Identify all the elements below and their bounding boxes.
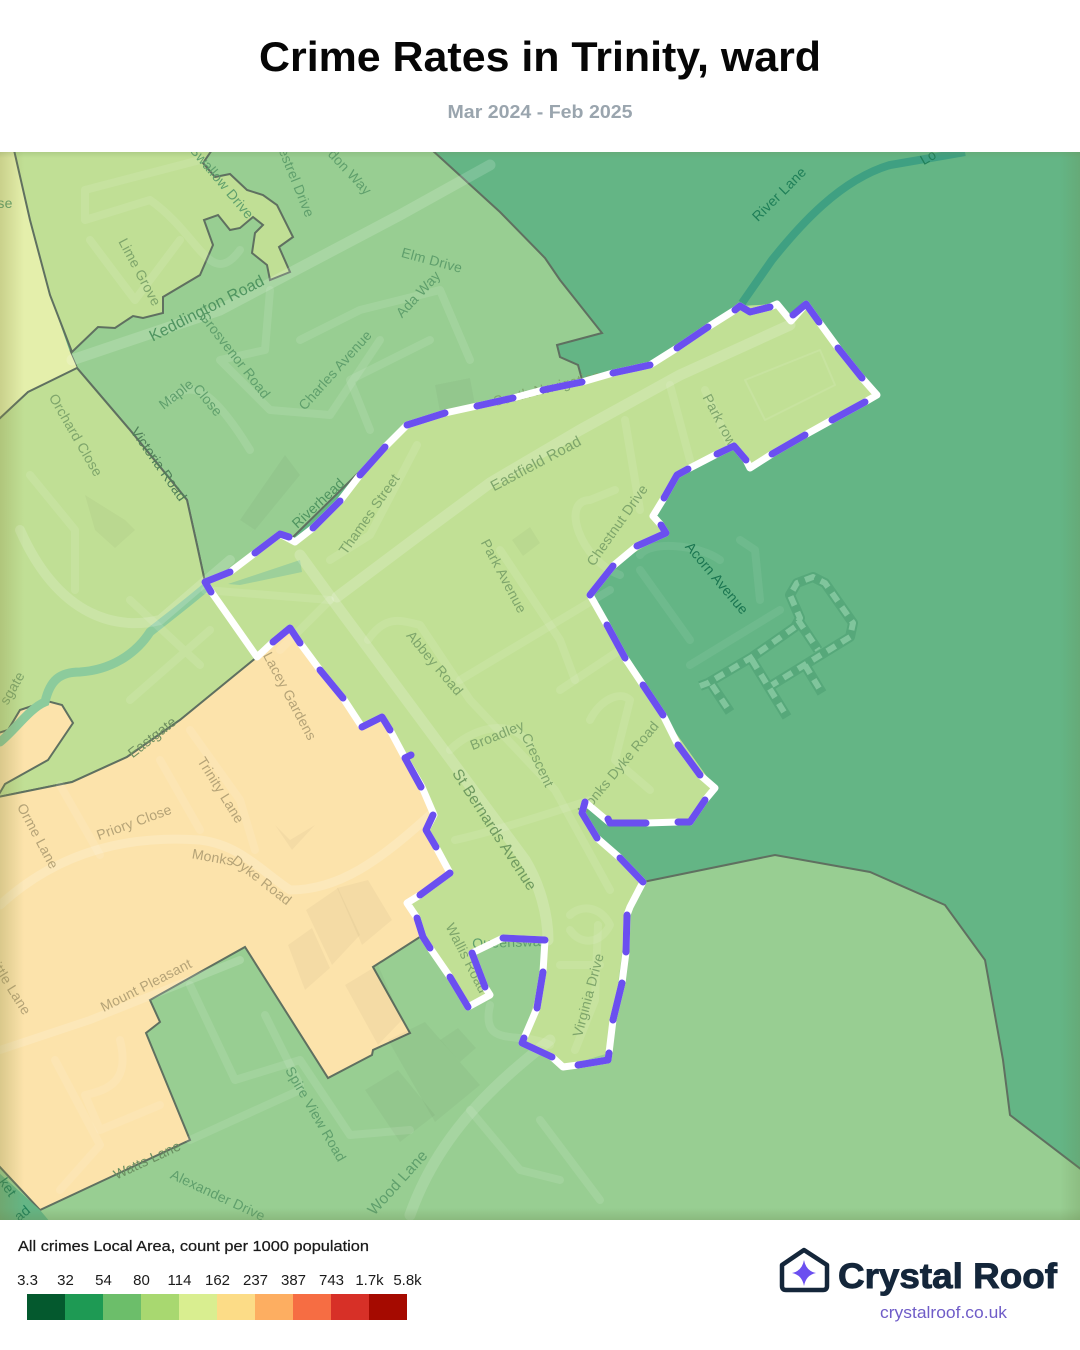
road labels: green areas (0, 137, 939, 1224)
legend title: All crimes Local Area, count per 1000 population (18, 1238, 369, 1255)
buildings (85, 378, 540, 1142)
road labels: orange area: Trinity Lane (194, 754, 248, 826)
website: crystalroof.co.uk (880, 1304, 1008, 1322)
road labels: orange area: Monks (191, 845, 235, 869)
ward boundary: purple dashes (205, 304, 865, 1065)
road labels: orange area: Lacey Gardens (260, 649, 320, 743)
corner area: south-west dark green (0, 1172, 50, 1222)
legend scale values: 162 (205, 1272, 230, 1289)
ward boundary: white line (205, 304, 877, 1067)
legend scale values: 32 (57, 1272, 74, 1289)
legend scale values: 114 (168, 1272, 191, 1289)
road labels: ward: Thames Street (335, 471, 403, 557)
legend scale values: 3.3 (17, 1272, 38, 1289)
legend scale values (17, 1272, 422, 1289)
legend scale values: 1.7k (355, 1272, 384, 1289)
road labels: orange area: Mount Pleasant (98, 955, 194, 1015)
road labels: green areas: Acorn Avenue (682, 539, 752, 617)
road labels: green areas: Victoria Road (128, 424, 190, 504)
road labels: ward: Crescent (519, 731, 557, 789)
road labels: green areas: Close (190, 381, 226, 419)
road labels: green areas: Watts Lane (111, 1137, 183, 1183)
map (0, 152, 1080, 1220)
legend scale values: 237 (243, 1272, 268, 1289)
road labels: green areas: Maple (156, 376, 196, 412)
road labels: ward: Virginia Drive (569, 951, 607, 1039)
logo wordmark: Crystal Roof (838, 1257, 1057, 1296)
road labels: ward (335, 367, 741, 1039)
road labels: ward: Abbey Road (403, 628, 467, 698)
crime rate area: western light green (0, 368, 257, 797)
legend scale values: 80 (133, 1272, 150, 1289)
road labels: ward: Chestnut Drive (583, 481, 651, 569)
road labels: green areas: River Lane (749, 164, 809, 224)
road labels: orange area: Orme Lane (14, 801, 62, 871)
road labels: orange area (0, 649, 320, 1018)
ward area: Trinity (205, 304, 877, 1067)
crime rate area: pale western strip (0, 150, 77, 420)
boundary: southern mid green edge (643, 855, 1080, 1170)
road labels: green areas: Wood Lane (365, 1147, 431, 1219)
road labels: green areas: Orchard Close (46, 391, 106, 479)
crime rate area: southern mid green (0, 855, 1080, 1222)
road labels: ward: Broadley (468, 717, 526, 753)
road labels: ward: Park row (700, 391, 741, 449)
estate road: hatched cul-de-sac (700, 577, 853, 717)
road labels: green areas: Lime Grove (115, 235, 165, 309)
legend scale values: 5.8k (393, 1272, 422, 1289)
legend scale values: 54 (95, 1272, 112, 1289)
road labels: ward: Monks Dyke Road (574, 718, 662, 818)
crime rate area: highest band, orange (0, 628, 470, 1210)
river (0, 560, 302, 742)
icon: house with star (782, 1250, 827, 1290)
subtitle: date range: Mar 2024 - Feb 2025 (448, 101, 632, 122)
road labels: ward: Queensway (472, 933, 548, 951)
road labels: green areas: Eastgate (125, 713, 179, 761)
crime rate area: lowest band background (0, 152, 1080, 1220)
road labels: green areas: Keddington Road (147, 273, 267, 345)
crime rate area: northern mid green (70, 150, 602, 582)
road labels: orange area: Priory Close (94, 801, 174, 843)
road labels: ward: South Navigation (492, 367, 602, 409)
road labels: green areas: Riverhead (289, 475, 347, 531)
legend scale values: 743 (319, 1272, 344, 1289)
logo (780, 1248, 1058, 1322)
crime rate area: north-west light green (14, 150, 293, 352)
road labels: green areas: Charles Avenue (295, 327, 375, 413)
road labels: ward: Eastfield Road (488, 433, 584, 495)
legend scale values: 387 (281, 1272, 306, 1289)
road network (0, 160, 835, 1215)
road labels: green areas: Grosvenor Road (196, 308, 274, 402)
road labels: green areas: Spire View Road (282, 1064, 350, 1164)
road labels: ward: Park Avenue (478, 536, 530, 616)
road labels: green areas: Ada Way (392, 267, 444, 321)
road labels: green areas: Elm Drive (400, 244, 464, 276)
road labels: ward: St Bernards Avenue (448, 766, 540, 894)
road labels: orange area: Dyke Road (229, 852, 295, 908)
river: northern canal (742, 152, 965, 303)
road labels: ward: Wallis Road (443, 920, 491, 996)
legend (17, 1238, 422, 1320)
legend colour bar (27, 1294, 407, 1320)
title: Crime Rates in Trinity, ward (259, 33, 821, 80)
